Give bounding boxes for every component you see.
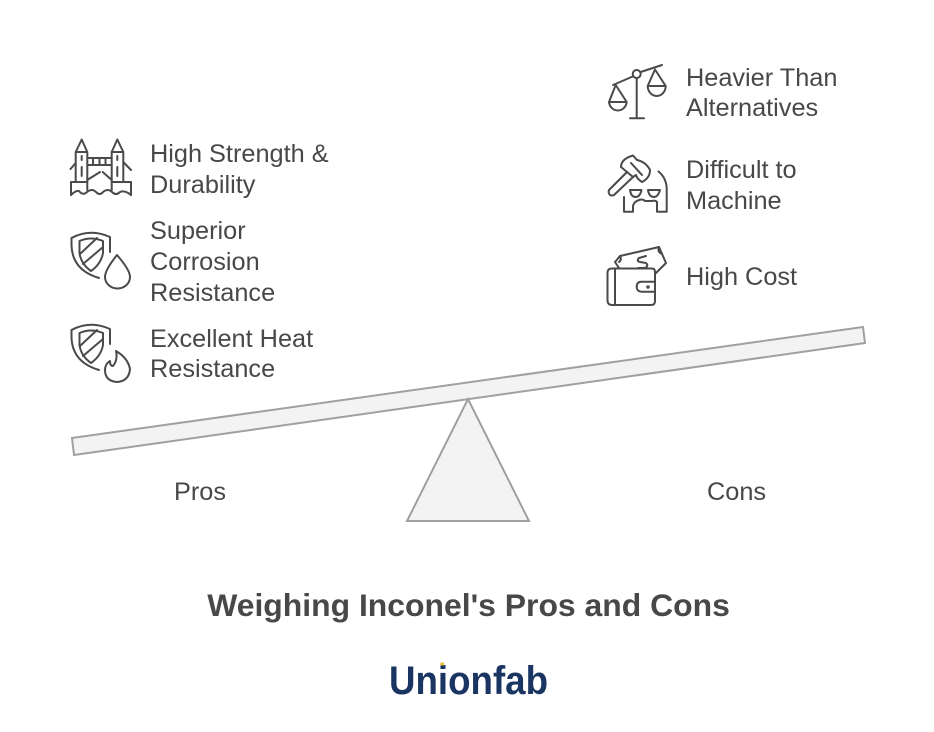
item: corrosion resistance: Resistance: [150, 279, 275, 307]
item: heat resistance: Resistance: [150, 355, 275, 383]
icon: shield and water drop: [72, 233, 130, 288]
seesaw beam: [72, 327, 865, 455]
item: heavier: Alternatives: [686, 94, 818, 122]
item: corrosion resistance: Corrosion: [150, 248, 260, 276]
label: pros: Pros: [174, 478, 226, 506]
seesaw fulcrum triangle: [407, 399, 529, 521]
logo: Unionfab: Unionfab: [389, 659, 548, 703]
text: Difficult to: [686, 156, 797, 184]
title: Weighing Inconel's Pros and Cons: [207, 587, 730, 623]
item: corrosion resistance: [72, 217, 275, 307]
text: Superior: [150, 217, 246, 245]
icon: axe and mask: [609, 156, 667, 212]
icon: tower bridge: [70, 140, 131, 195]
text: High Cost: [686, 263, 797, 291]
label: cons: Cons: [707, 478, 766, 506]
item: heat resistance: [72, 325, 313, 383]
item: high cost: [608, 247, 797, 305]
item: high strength: [70, 140, 329, 199]
icon: shield and flame: [72, 325, 130, 382]
item: high strength: Durability: [150, 171, 256, 199]
text: Heavier Than: [686, 64, 837, 92]
item: difficult to machine: Machine: [686, 187, 782, 215]
item: heavier: [609, 64, 837, 122]
icon: wallet and banknote: [608, 247, 666, 305]
item: difficult to machine: [609, 156, 797, 215]
icon: balance scales: [609, 65, 666, 118]
text: High Strength &: [150, 140, 329, 168]
text: Excellent Heat: [150, 325, 313, 353]
